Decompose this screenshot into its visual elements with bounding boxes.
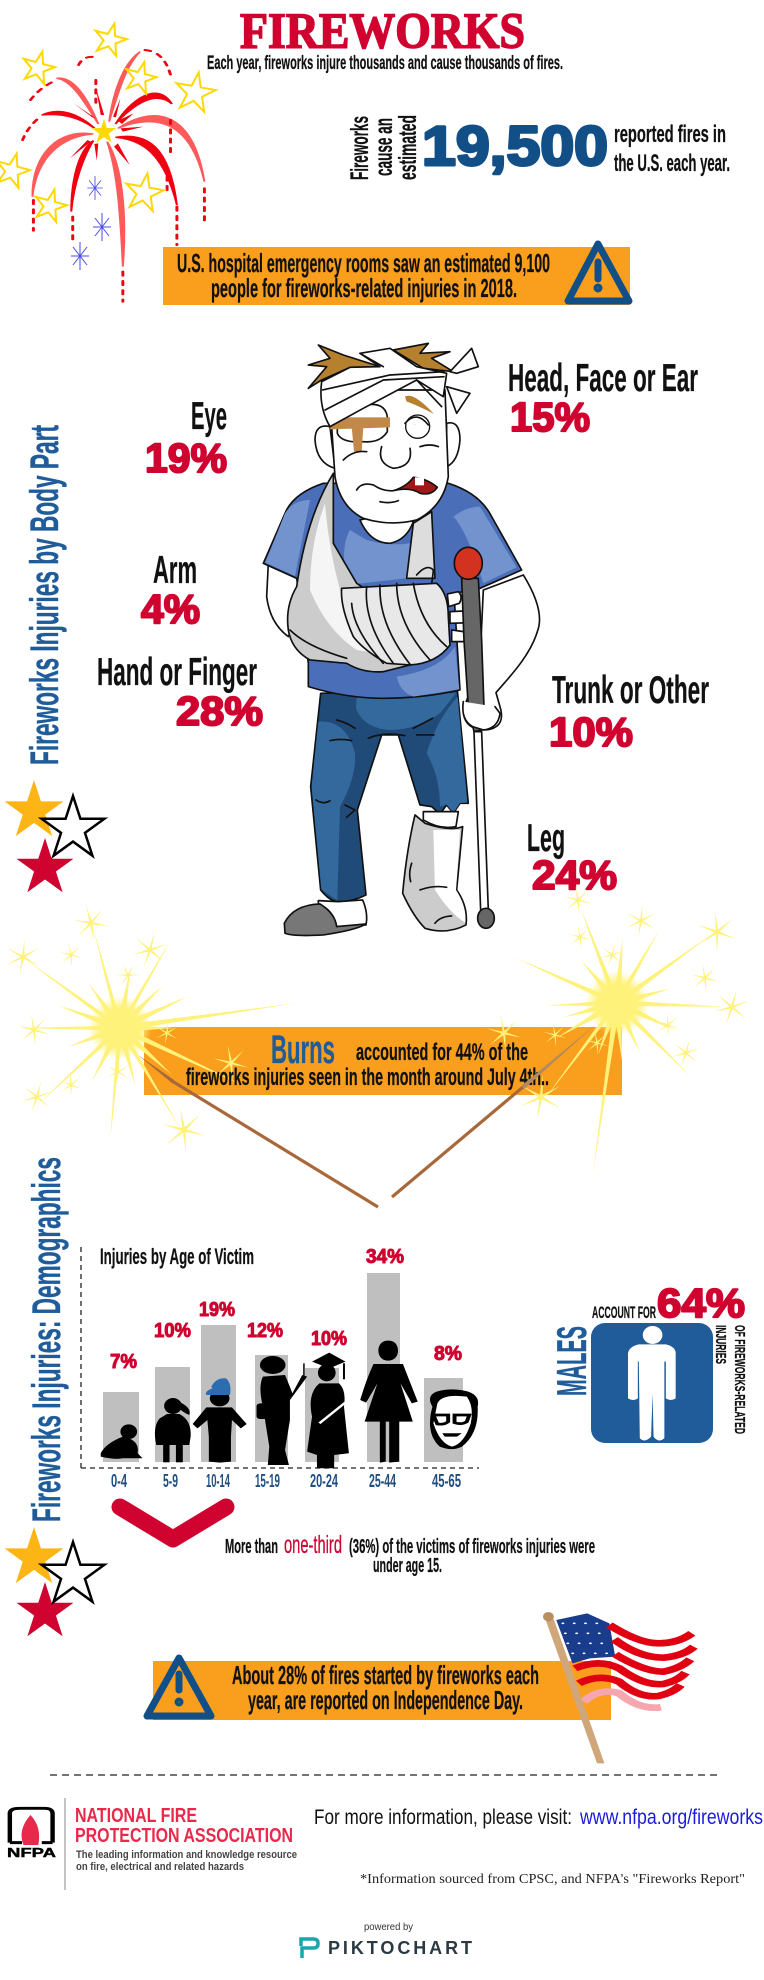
illustration: left sparkler burst — [0, 903, 296, 1156]
panel: males account for 64%: INJURIES — [712, 1325, 729, 1364]
age group labels: 15-19 — [255, 1471, 280, 1491]
label: leg: 24% — [532, 852, 617, 898]
man: ears — [315, 423, 460, 468]
value labels: 10% — [311, 1328, 347, 1350]
statistic: 19,500 fires: cause an — [370, 118, 398, 176]
text: source note: *Information sourced from CPSC, and NFPA's "Fireworks Report" — [360, 1872, 745, 1887]
illustration: injured man — [263, 343, 540, 935]
chart title: Injuries by Age of Victim — [100, 1244, 254, 1269]
icon: warning triangle — [147, 1658, 211, 1716]
callout: independence day: year, are reported on Independence Day. — [248, 1685, 523, 1715]
text: one-third of victims: More than — [225, 1536, 278, 1558]
silhouette: boy with cap — [193, 1378, 247, 1463]
man: face — [332, 390, 448, 523]
label: arm: Arm — [153, 549, 197, 592]
man: hair — [308, 343, 453, 388]
value labels: 7% — [110, 1351, 137, 1373]
label: arm: 4% — [141, 586, 200, 632]
age group labels: 25-44 — [369, 1471, 396, 1491]
silhouette: woman — [360, 1341, 418, 1463]
label: leg — [527, 817, 617, 898]
age group labels — [111, 1471, 461, 1491]
callout: hospital emergency rooms: people for fireworks-related injuries in 2018. — [211, 273, 517, 303]
label: trunk or other: 10% — [549, 709, 633, 755]
statistic: 19,500 fires: Fireworks — [346, 116, 374, 180]
label: head, face or ear — [508, 357, 698, 440]
value labels: 34% — [366, 1246, 404, 1268]
logo: NFPA: The leading information and knowledge resource — [76, 1849, 297, 1861]
icon: three stars — [5, 780, 104, 892]
callout: hospital emergency rooms — [163, 244, 630, 305]
panel: males account for 64%: MALES — [548, 1326, 595, 1396]
panel: males account for 64%: OF FIREWORKS-RELATED — [731, 1325, 748, 1434]
man: right arm — [463, 575, 540, 730]
callout: burns: accounted for 44% of the — [356, 1039, 528, 1066]
panel: males account for 64%: 64% — [657, 1280, 745, 1326]
age group labels: 5-9 — [163, 1471, 178, 1491]
callout: independence day — [147, 1658, 611, 1720]
callout: burns: Burns — [271, 1028, 335, 1072]
label: hand or finger: 28% — [176, 688, 263, 734]
label: hand or finger — [97, 651, 263, 734]
section heading: demographics: Fireworks Injuries: Demographics — [25, 1157, 69, 1522]
label: eye: 19% — [145, 435, 227, 481]
man: hand on crutch — [463, 702, 500, 730]
bars — [103, 1273, 463, 1462]
logo: NFPA: PROTECTION ASSOCIATION — [75, 1825, 293, 1847]
text: more information: For more information, please visit: — [314, 1806, 572, 1829]
text: one-third of victims: one-third — [284, 1531, 342, 1559]
icon: warning triangle — [568, 244, 629, 301]
age group labels: 0-4 — [111, 1471, 127, 1491]
logo: piktochart — [301, 1922, 472, 1958]
label: leg: Leg — [527, 817, 565, 860]
man: trousers — [311, 690, 468, 902]
man: shoe — [284, 900, 367, 935]
man: leg cast — [403, 812, 466, 931]
logo: NFPA — [7, 1798, 297, 1890]
panel: males account for 64%: ACCOUNT FOR — [592, 1303, 656, 1322]
statistic: 19,500 fires: 19,500 — [422, 114, 608, 177]
man: head bandage — [321, 348, 447, 427]
labels: body part percentages — [97, 357, 709, 898]
panel: males account for 64% — [548, 1280, 748, 1443]
man: neck — [360, 513, 413, 543]
label: eye — [145, 395, 227, 481]
icon: three stars — [5, 1527, 104, 1636]
logo: NFPA: on fire, electrical and related hazards — [76, 1861, 244, 1873]
illustration: firework burst — [0, 19, 218, 302]
age group labels: 10-14 — [206, 1471, 230, 1491]
text: one-third of victims: under age 15. — [373, 1555, 442, 1577]
silhouette: graduate — [307, 1353, 349, 1468]
title: FIREWORKS — [240, 4, 525, 60]
man: fingers — [447, 592, 475, 642]
value labels: 19% — [199, 1299, 235, 1321]
value labels: 8% — [434, 1343, 462, 1365]
chart: injuries by age of victim — [81, 1244, 479, 1491]
logo: piktochart: PIKTOCHART — [328, 1938, 472, 1958]
man: facial features — [330, 396, 438, 503]
man: left arm — [267, 563, 310, 637]
logo: NFPA: NATIONAL FIRE — [75, 1805, 197, 1827]
age group labels: 45-65 — [432, 1471, 461, 1491]
silhouette: teenager with phone — [257, 1356, 307, 1465]
statistic: 19,500 fires: estimated — [394, 115, 422, 180]
silhouette: baby — [101, 1424, 143, 1459]
man: shirt — [263, 483, 522, 698]
section heading: injuries by body part: Fireworks Injuries by Body Part — [23, 425, 67, 765]
silhouette: girl — [155, 1398, 191, 1462]
label: head, face or ear: 15% — [510, 394, 590, 440]
statistic: 19,500 fires — [346, 114, 730, 180]
label: arm — [141, 549, 200, 632]
label: eye: Eye — [191, 395, 227, 438]
value labels: 12% — [247, 1320, 283, 1342]
value labels — [110, 1246, 462, 1373]
logo: NFPA: NFPA — [7, 1845, 57, 1860]
label: trunk or other — [549, 669, 709, 755]
icon: male figure — [628, 1326, 676, 1440]
label: hand or finger: Hand or Finger — [97, 651, 257, 694]
text: one-third of victims — [225, 1531, 595, 1577]
icon: red chevron — [120, 1507, 226, 1539]
illustration: american flag — [543, 1612, 694, 1763]
logo: piktochart: powered by — [364, 1922, 413, 1933]
callout: burns — [0, 884, 757, 1207]
age group labels: 20-24 — [310, 1471, 338, 1491]
man: arm sling — [288, 473, 450, 672]
value labels: 10% — [154, 1320, 191, 1342]
illustration: right sparkler burst — [482, 884, 757, 1174]
illustration: sparkler sticks — [138, 1025, 595, 1207]
silhouette: older man — [430, 1389, 478, 1449]
man: crutch — [454, 547, 494, 928]
silhouettes by age — [101, 1341, 478, 1468]
